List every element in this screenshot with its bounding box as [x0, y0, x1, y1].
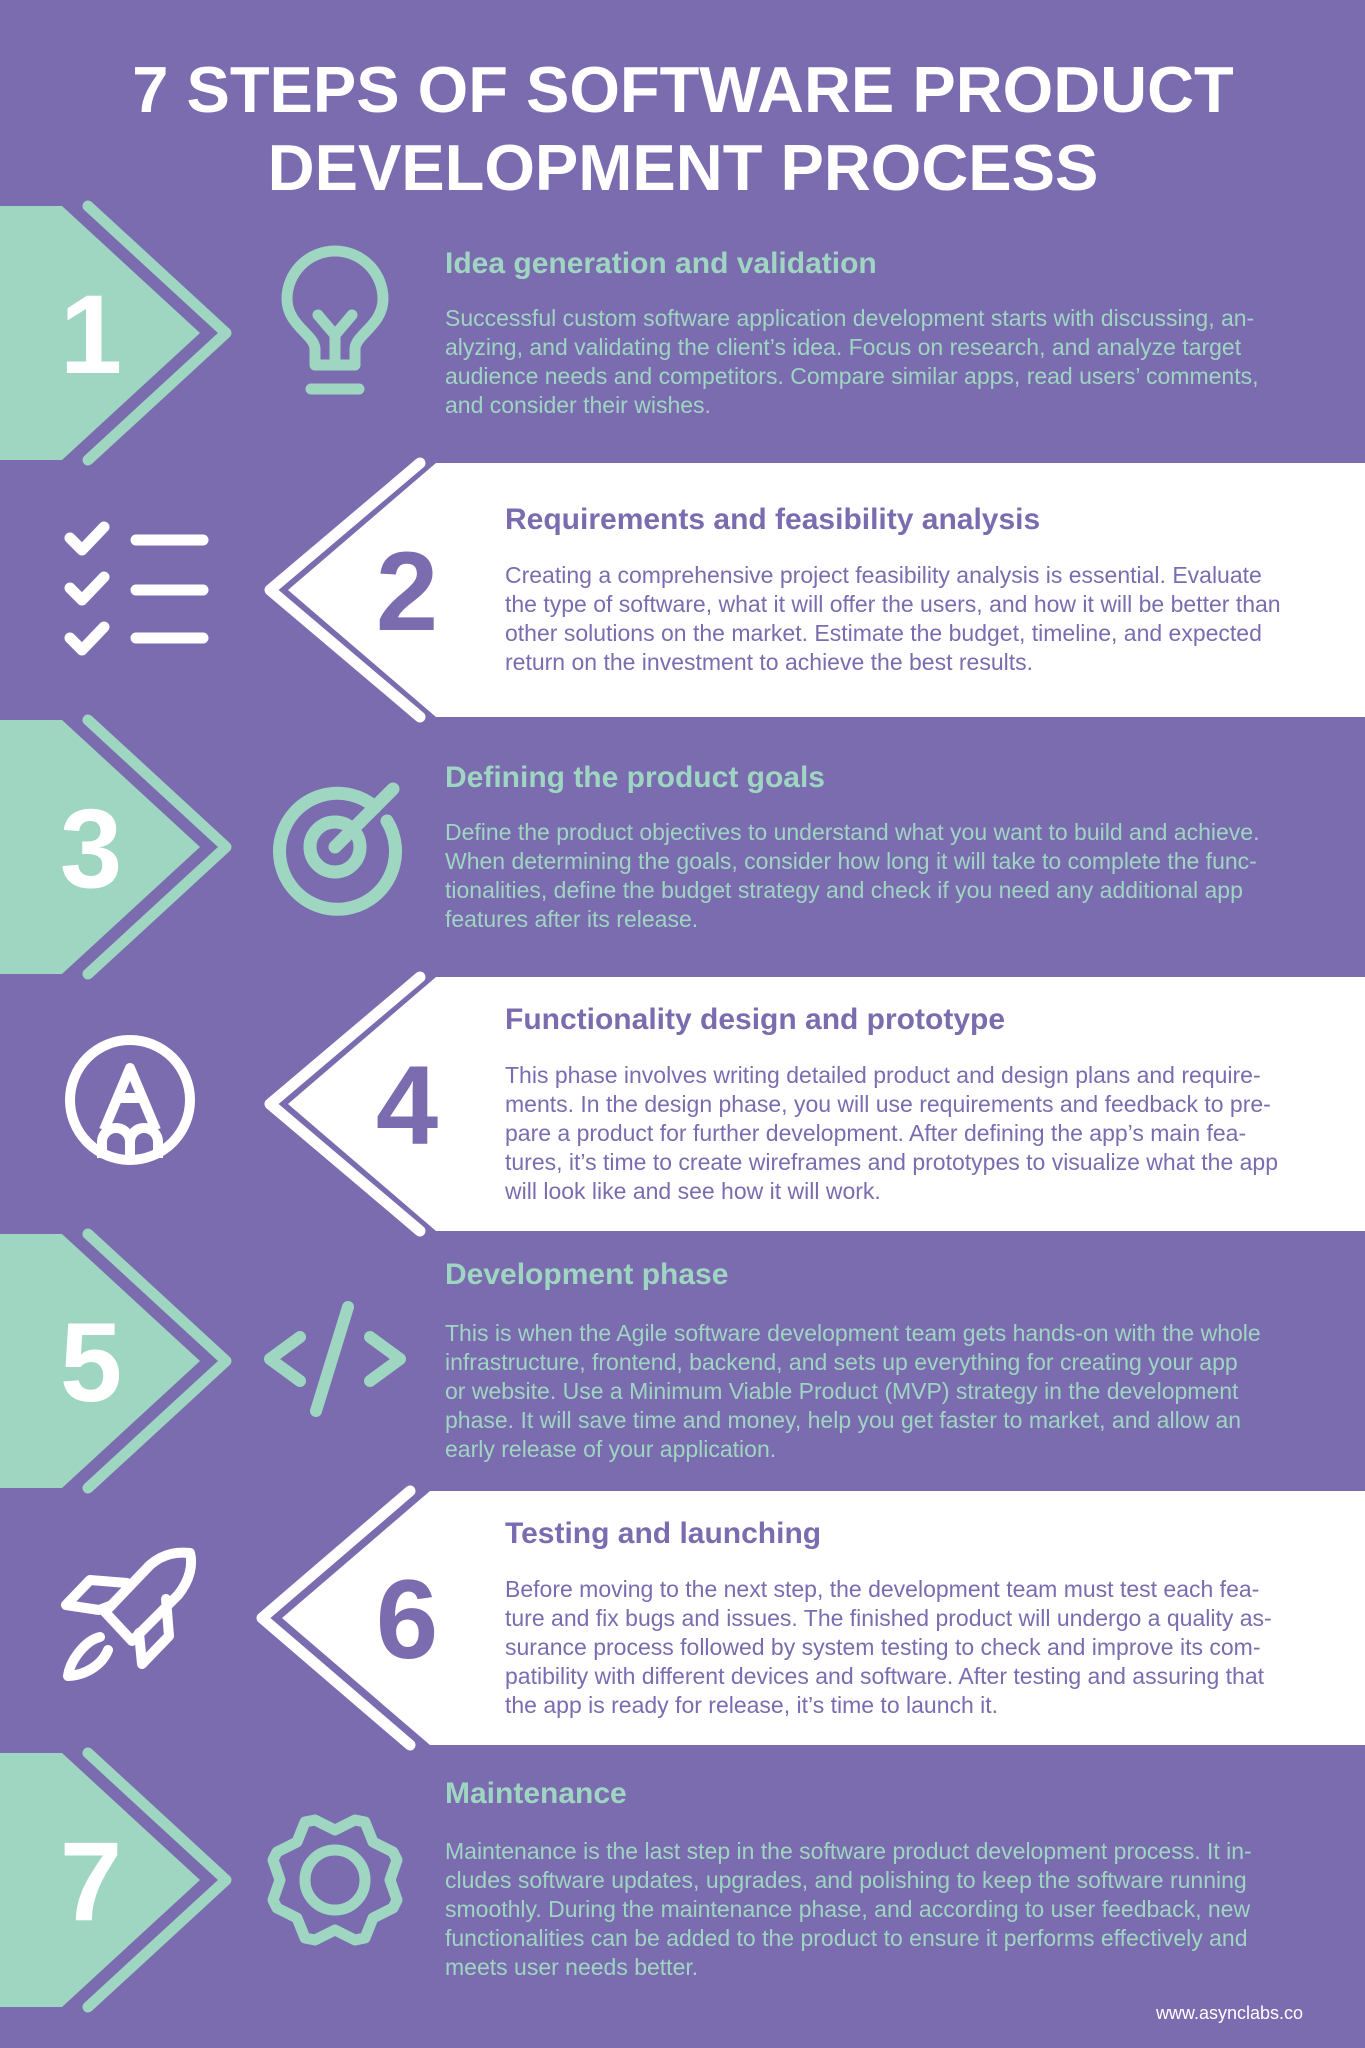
- step 5 text: Development phase: [445, 1258, 728, 1291]
- step 7 text: Maintenance: [445, 1777, 627, 1810]
- icon: light bulb: [287, 251, 383, 389]
- step 4 text: Functionality design and prototype: [505, 1003, 1005, 1036]
- step 5 number badge: [0, 1234, 226, 1488]
- step 1 text: alyzing, and validating the client’s idea. Focus on research, and analyze target: [445, 334, 1242, 360]
- step 2 text: the type of software, what it will offer the users, and how it will be better than: [505, 591, 1281, 617]
- step 6 text: Before moving to the next step, the development team must test each fea-: [505, 1576, 1259, 1602]
- step 2 white banner: [270, 463, 1365, 717]
- step 2 text: return on the investment to achieve the best results.: [505, 649, 1033, 675]
- step 3 text: Define the product objectives to understand what you want to build and achieve.: [445, 819, 1259, 845]
- step 1 number badge: 1: [60, 272, 122, 397]
- step 6 white banner: [262, 1491, 1365, 1745]
- step 7 text: [445, 1777, 1252, 1980]
- step 1 text: Idea generation and validation: [445, 247, 877, 280]
- step 2 white banner: 2: [376, 529, 438, 654]
- icon: pencil in circle: [70, 1040, 190, 1160]
- icon: rocket: [66, 1553, 191, 1676]
- icon: code brackets: [270, 1307, 400, 1411]
- step 6 text: patibility with different devices and software. After testing and assuring that: [505, 1663, 1265, 1689]
- step 2 text: other solutions on the market. Estimate the budget, timeline, and expected: [505, 620, 1262, 646]
- step 6 text: surance process followed by system testing to check and improve its com-: [505, 1634, 1260, 1660]
- step 5 text: [445, 1258, 1261, 1462]
- step 4 text: [504, 1003, 1278, 1204]
- step 5 text: phase. It will save time and money, help you get faster to market, and allow an: [445, 1407, 1241, 1433]
- step 4 text: will look like and see how it will work.: [504, 1178, 881, 1204]
- step 3 number badge: [0, 720, 226, 974]
- step 7 text: meets user needs better.: [445, 1954, 698, 1980]
- step 3 text: Defining the product goals: [445, 761, 825, 794]
- step 5 text: early release of your application.: [445, 1436, 776, 1462]
- step 3 text: features after its release.: [445, 906, 698, 932]
- title: 7 STEPS OF SOFTWARE PRODUCT: [132, 53, 1234, 126]
- step 2 text: [505, 503, 1281, 675]
- step 4 panel: [70, 977, 1365, 1231]
- step 6 text: the app is ready for release, it’s time to launch it.: [505, 1692, 998, 1718]
- step 7 number badge: 7: [60, 1819, 122, 1944]
- step 6 text: Testing and launching: [505, 1517, 821, 1550]
- step 3 number badge: 3: [60, 786, 122, 911]
- step 7 panel: [0, 1753, 1252, 2007]
- step 6 white banner: 6: [376, 1557, 438, 1682]
- step 4 text: ments. In the design phase, you will use requirements and feedback to pre-: [505, 1091, 1271, 1117]
- step 3 text: tionalities, define the budget strategy and check if you need any additional app: [445, 877, 1243, 903]
- step 5 text: or website. Use a Minimum Viable Product (MVP) strategy in the development: [445, 1378, 1239, 1404]
- step 5 number badge: 5: [60, 1300, 122, 1425]
- title: DEVELOPMENT PROCESS: [268, 131, 1098, 204]
- step 4 white banner: 4: [376, 1043, 438, 1168]
- step 7 text: smoothly. During the maintenance phase, and according to user feedback, new: [445, 1896, 1250, 1922]
- step 2 text: Requirements and feasibility analysis: [505, 503, 1040, 536]
- step 1 text: Successful custom software application development starts with discussing, an-: [445, 305, 1254, 331]
- step 1 text: and consider their wishes.: [445, 392, 711, 418]
- step 5 text: This is when the Agile software development team gets hands-on with the whole: [445, 1320, 1261, 1346]
- step 1 number badge: [0, 206, 226, 460]
- step 4 text: tures, it’s time to create wireframes and prototypes to visualize what the app: [505, 1149, 1278, 1175]
- title: [132, 53, 1234, 204]
- step 5 panel: [0, 1234, 1261, 1488]
- step 4 text: This phase involves writing detailed product and design plans and require-: [505, 1062, 1261, 1088]
- step 6 text: ture and fix bugs and issues. The finished product will undergo a quality as-: [505, 1605, 1272, 1631]
- step 6 text: [505, 1517, 1272, 1718]
- step 3 panel: [0, 720, 1259, 974]
- step 4 white banner: [270, 977, 1365, 1231]
- icon: checklist: [70, 527, 203, 650]
- icon: gear: [273, 1820, 397, 1940]
- step 2 text: Creating a comprehensive project feasibility analysis is essential. Evaluate: [505, 562, 1262, 588]
- icon: target: [280, 789, 396, 909]
- step 7 text: Maintenance is the last step in the software product development process. It in-: [445, 1838, 1252, 1864]
- step 3 text: When determining the goals, consider how long it will take to complete the func-: [445, 848, 1257, 874]
- step 7 text: functionalities can be added to the product to ensure it performs effectively and: [445, 1925, 1248, 1951]
- step 7 number badge: [0, 1753, 226, 2007]
- step 1 panel: [0, 206, 1258, 460]
- step 5 text: infrastructure, frontend, backend, and sets up everything for creating your app: [445, 1349, 1238, 1375]
- step 4 text: pare a product for further development. After defining the app’s main fea-: [505, 1120, 1246, 1146]
- step 1 text: audience needs and competitors. Compare similar apps, read users’ comments,: [445, 363, 1258, 389]
- footer url: www.asynclabs.co: [1155, 2003, 1303, 2023]
- step 7 text: cludes software updates, upgrades, and polishing to keep the software running: [445, 1867, 1247, 1893]
- step 3 text: [445, 761, 1259, 932]
- step 6 panel: [66, 1491, 1365, 1745]
- step 1 text: [445, 247, 1258, 418]
- step 2 panel: [70, 463, 1365, 717]
